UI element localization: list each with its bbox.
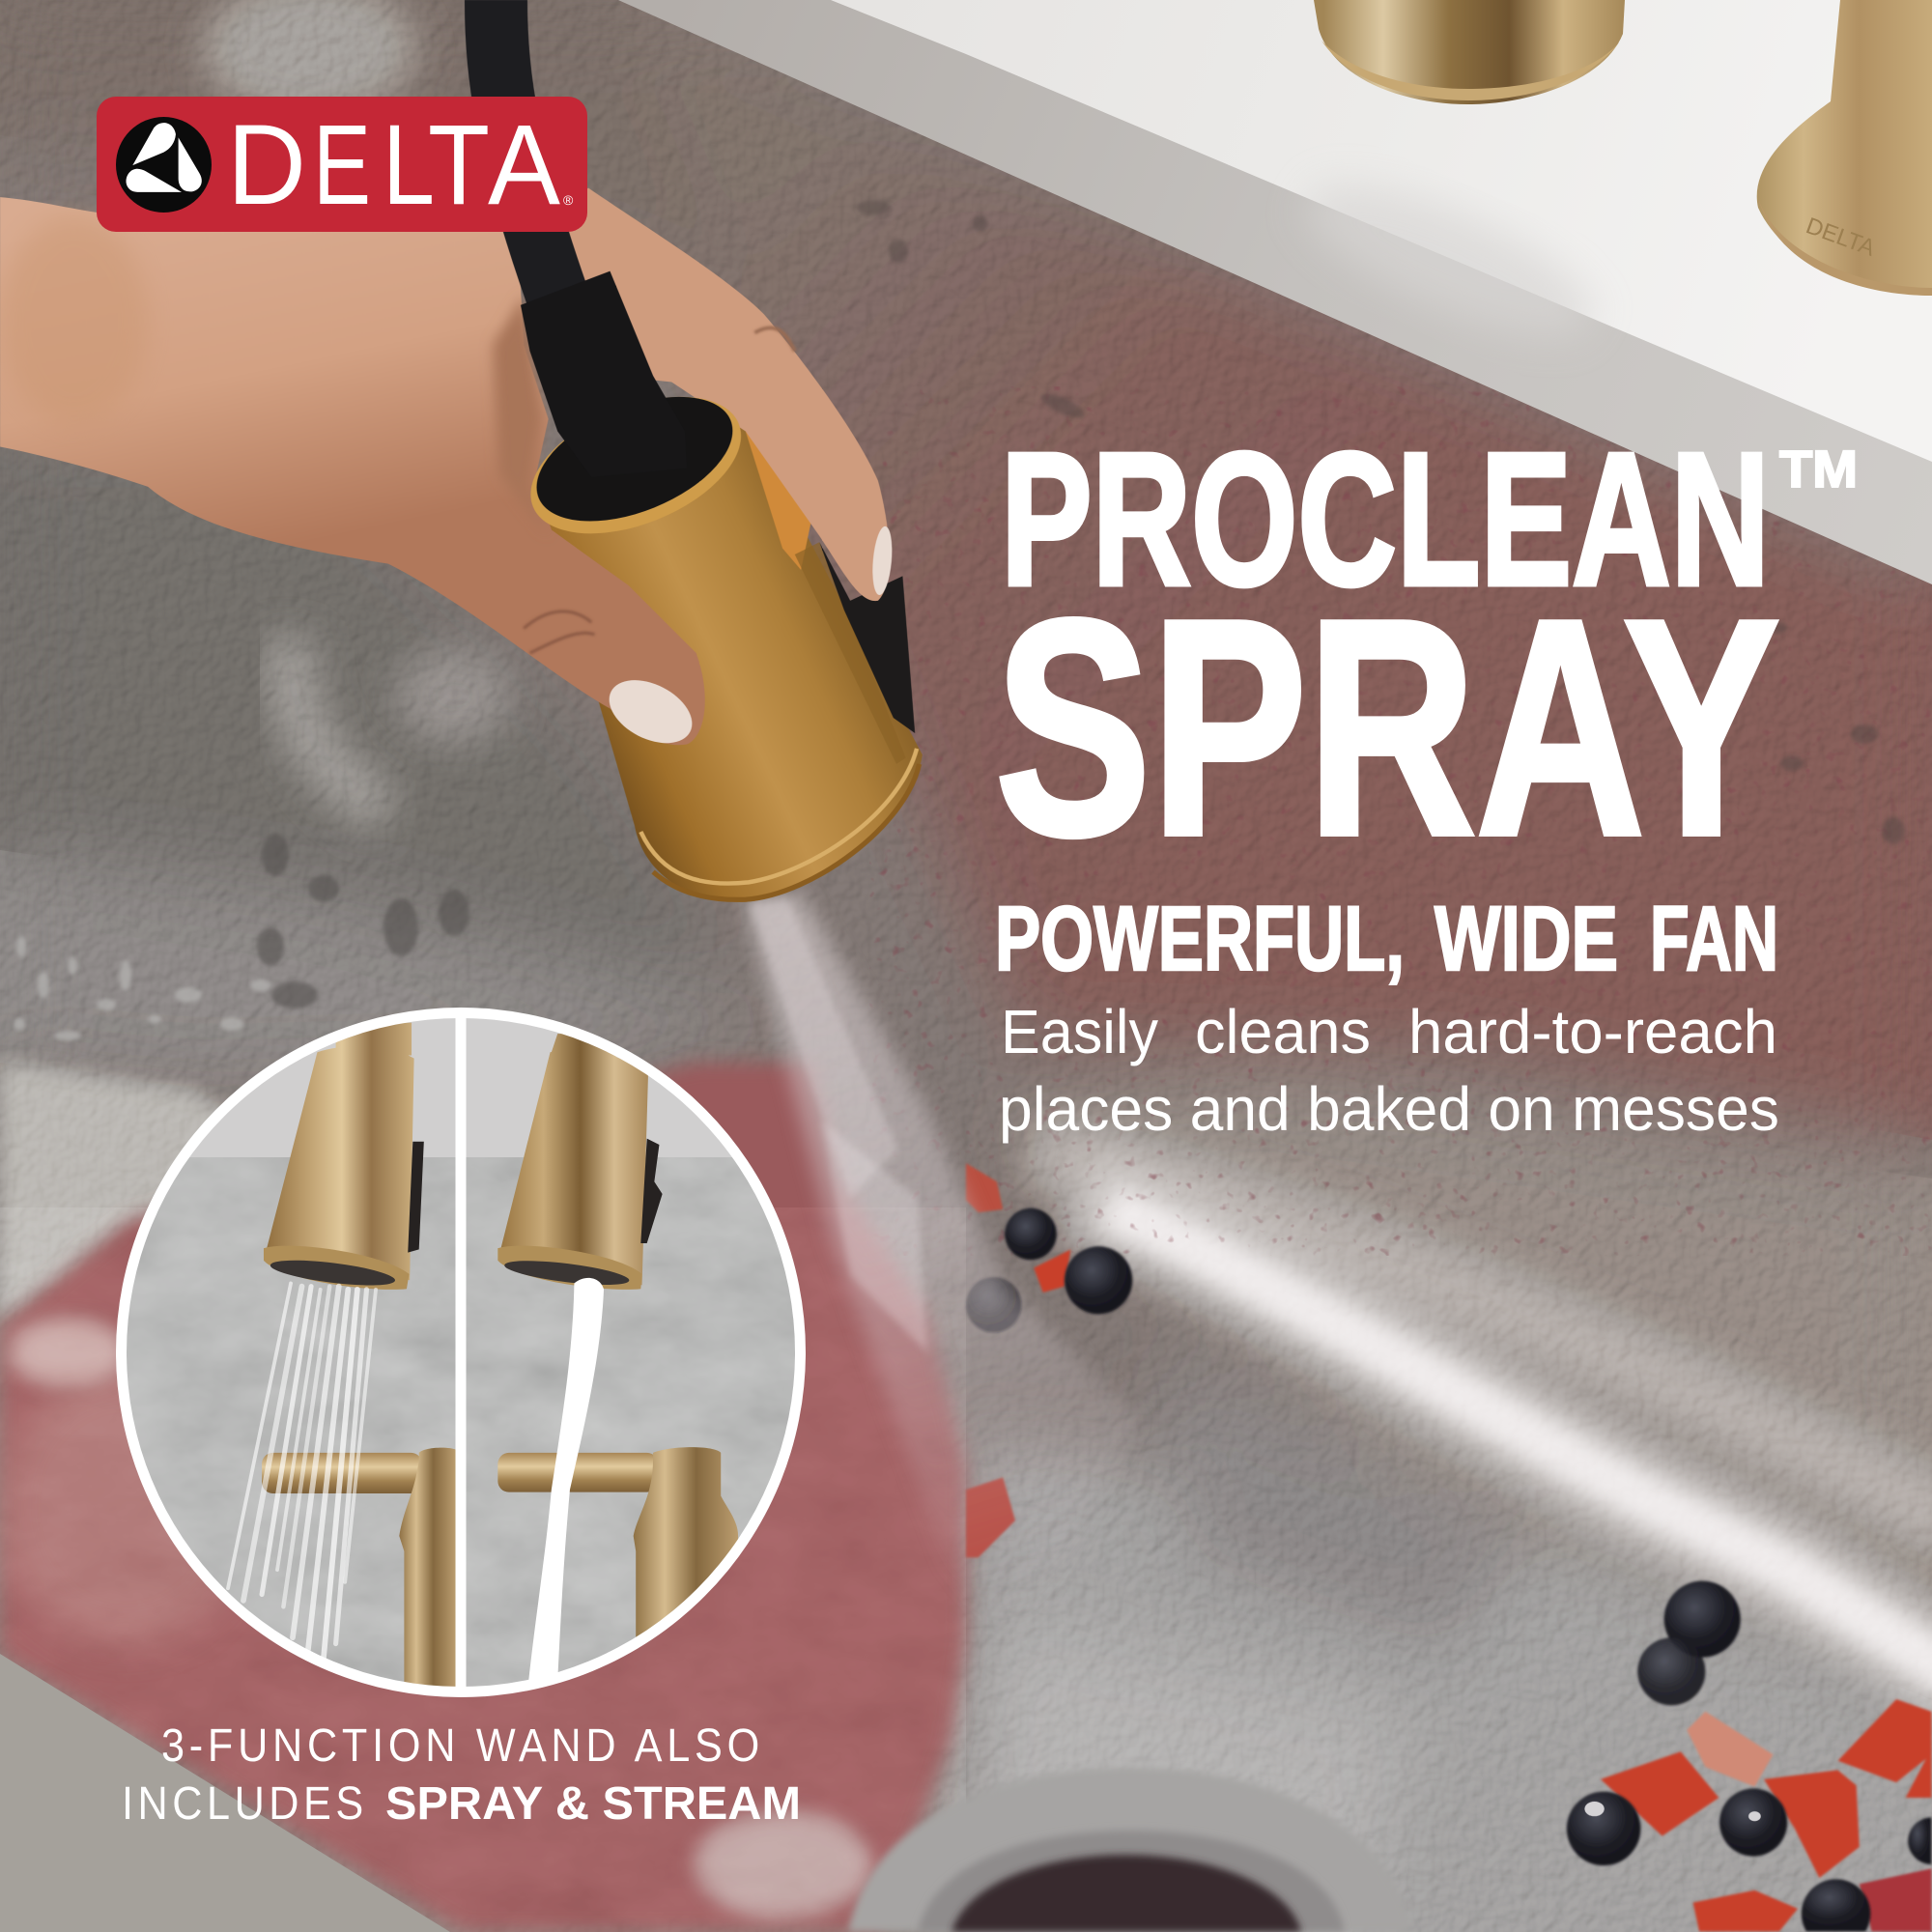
wordmark: T <box>428 101 490 229</box>
wand bottom rim <box>640 749 917 884</box>
beige sink corner, left <box>0 1063 280 1323</box>
countertop <box>618 0 1932 584</box>
wordmark: A <box>488 101 560 229</box>
Delta logo badge <box>97 97 587 232</box>
black connector <box>521 271 687 477</box>
inset caption: SPRAY & STREAM <box>385 1778 801 1830</box>
body text: Easily <box>1001 997 1158 1066</box>
gold wand body <box>545 407 923 902</box>
blueberries <box>966 1208 1931 1931</box>
inset caption <box>122 1719 801 1830</box>
left spray water <box>228 1283 376 1660</box>
subheading: FAN <box>1650 888 1778 990</box>
wordmark <box>227 101 560 229</box>
subheading: POWERFUL, <box>995 888 1405 990</box>
faucet base, left <box>1314 0 1625 104</box>
faucet base, right: DELTA <box>1803 213 1879 262</box>
fingernail <box>870 526 895 596</box>
bottom-left basin wall <box>0 1654 450 1932</box>
body text: places and baked on messes <box>999 1074 1779 1144</box>
wordmark: D <box>227 101 306 229</box>
wordmark: L <box>383 101 435 229</box>
right wand <box>497 1034 663 1290</box>
inset marble counter <box>116 1157 811 1698</box>
gold top rim and black gasket <box>511 369 760 561</box>
hand holding spray wand <box>0 0 923 902</box>
right faucet handle <box>497 1447 738 1644</box>
title: ProClean Spray: TM <box>1779 440 1858 498</box>
fruit highlights <box>1584 1802 1761 1821</box>
body text: cleans <box>1195 997 1371 1066</box>
logo mark <box>116 117 212 213</box>
spray fan <box>744 894 1140 1662</box>
left wand <box>264 1023 424 1291</box>
red fruit puree <box>0 1063 966 1932</box>
water droplets, lower left wall <box>14 936 271 1040</box>
inset caption: 3-FUNCTION WAND ALSO <box>161 1719 759 1772</box>
hand shading <box>493 296 549 536</box>
food specks <box>869 386 1932 1256</box>
strawberries and blueberries <box>966 1163 1931 1931</box>
body text: hard-to-reach <box>1408 997 1777 1066</box>
inset circle: spray and stream comparison <box>116 1005 811 1700</box>
registered mark: ® <box>563 192 574 208</box>
thumbnail <box>599 668 702 756</box>
wordmark: E <box>313 101 371 229</box>
silver band on right wall <box>1034 1150 1932 1526</box>
upper wall reflection <box>203 0 415 116</box>
back of hand and finger <box>511 188 890 601</box>
subheading: WIDE <box>1435 888 1618 990</box>
curved wall reflection <box>290 638 386 811</box>
wand upper groove <box>746 431 813 570</box>
countertop top surface <box>831 0 1932 462</box>
faucet base, right <box>1757 0 1932 296</box>
body text <box>999 997 1779 1144</box>
left faucet handle <box>262 1448 456 1687</box>
title: ProClean Spray <box>995 413 1858 899</box>
drain <box>848 1768 1412 1932</box>
inset wall <box>189 1018 732 1157</box>
strawberries <box>966 1163 1931 1931</box>
bright streak highlight <box>1082 1193 1932 1686</box>
right stream of water <box>528 1278 604 1681</box>
inset divider <box>456 1005 466 1700</box>
inset caption: INCLUDES <box>122 1777 363 1830</box>
braided black hose <box>496 0 564 314</box>
black trigger <box>819 542 915 733</box>
